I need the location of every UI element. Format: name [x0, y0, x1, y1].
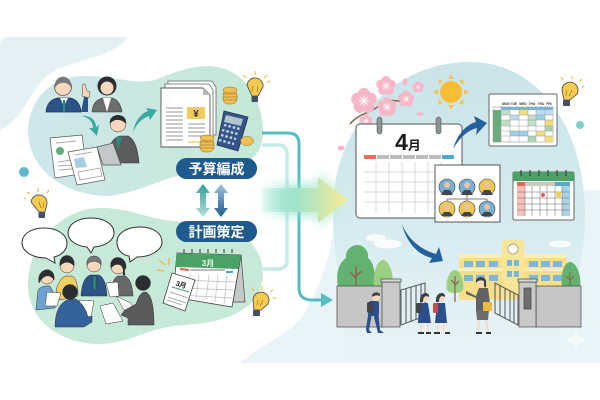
person: girl student left: [416, 293, 431, 333]
big arrow: [262, 172, 350, 228]
person: woman in yellow: [56, 256, 78, 300]
connector: pale lower line: [262, 212, 287, 269]
gate left: [401, 283, 425, 325]
person: man in navy: [81, 256, 107, 296]
trees: [337, 245, 580, 302]
timetable day labels: TUE: [511, 102, 517, 106]
clock: [508, 244, 518, 254]
wall and gate posts: [337, 279, 581, 327]
person: colleague: [92, 76, 122, 112]
bubble middle: [68, 218, 114, 253]
bubble left: [22, 228, 67, 263]
icon: spark marks: [157, 258, 169, 271]
person: boy student: [366, 292, 384, 333]
label: planning pill: [176, 221, 257, 242]
background: pale blue shape bottom: [240, 190, 600, 363]
panel: weekly timetable: [489, 94, 557, 146]
label: planning pill: 計画策定: [188, 224, 244, 240]
person: manager: [46, 77, 90, 112]
document: form: [68, 147, 105, 185]
icon: April wall calendar: [356, 117, 462, 218]
person: teacher: [466, 277, 492, 333]
icon: March note: 3月: [175, 280, 187, 290]
icon: budget documents: ¥: [193, 109, 199, 120]
icon: light bulb top: [243, 71, 270, 102]
timetable day labels: WED: [519, 102, 527, 106]
connector: pale upper line: [262, 145, 287, 188]
icon: coin stack lower: [200, 135, 214, 152]
label: budget pill: 予算編成: [188, 161, 244, 177]
clouds: [366, 234, 571, 248]
people: manager and colleague: [46, 76, 122, 112]
timetable day labels: FRI: [546, 102, 552, 106]
icon: March desk calendar: [173, 249, 245, 307]
background: pale blue shape top left: [0, 37, 128, 130]
panel: budget blob: [28, 66, 263, 196]
icon: cherry blossom branch: [338, 76, 424, 150]
decoration dot: blue: [19, 167, 29, 177]
icon: March desk calendar: 3月: [202, 259, 214, 268]
panel: planning blob: [28, 208, 263, 344]
person: staff with clipboard: [107, 115, 139, 163]
decoration dot: teal: [576, 121, 584, 129]
speech bubbles: [22, 218, 162, 263]
label: budget pill: [176, 158, 257, 179]
icon: calculator: [217, 111, 248, 151]
timetable day labels: THU: [538, 102, 545, 106]
connector: teal line to school: [262, 133, 333, 307]
school building: [459, 240, 567, 300]
people: meeting group: [36, 256, 154, 327]
arrow: teal double: [196, 184, 210, 217]
person: girl student right: [433, 293, 450, 333]
arrow: blue double: [214, 184, 228, 217]
timetable day labels: MON: [502, 102, 510, 106]
arrow: teal down: [82, 116, 99, 136]
arrow: blue to school: [402, 224, 443, 263]
heading: April: 4月: [395, 129, 421, 155]
timetable day labels: [502, 102, 552, 106]
background: large blue circle: [333, 62, 585, 363]
bubble right: [117, 227, 162, 262]
clipboard: [97, 143, 121, 165]
arrow: teal up right: [133, 108, 157, 132]
icon: budget documents: [161, 81, 216, 147]
icon: March note: [163, 273, 195, 311]
person: front man in blue: [55, 284, 92, 327]
person: woman in grey: [111, 258, 133, 296]
gate right: [495, 283, 518, 325]
arrow: blue to timetable: [453, 116, 487, 149]
icon: light bulb lower right: [252, 286, 276, 316]
sparkle: [565, 329, 587, 351]
timetable day labels: THU: [529, 102, 536, 106]
document: report: [50, 135, 87, 178]
icon: light bulb left: [24, 188, 49, 218]
icon: coin stack upper: [223, 87, 237, 104]
icon: flat coin: [240, 136, 254, 146]
person: front man in dark: [121, 276, 154, 325]
person: woman in blue: [36, 270, 56, 310]
panel: month schedule calendar: [513, 170, 574, 220]
icon: light bulb right: [561, 76, 584, 106]
document: meeting handouts: [45, 282, 134, 324]
panel: organisation chart card: [435, 165, 500, 222]
icon: sun: [433, 74, 469, 110]
